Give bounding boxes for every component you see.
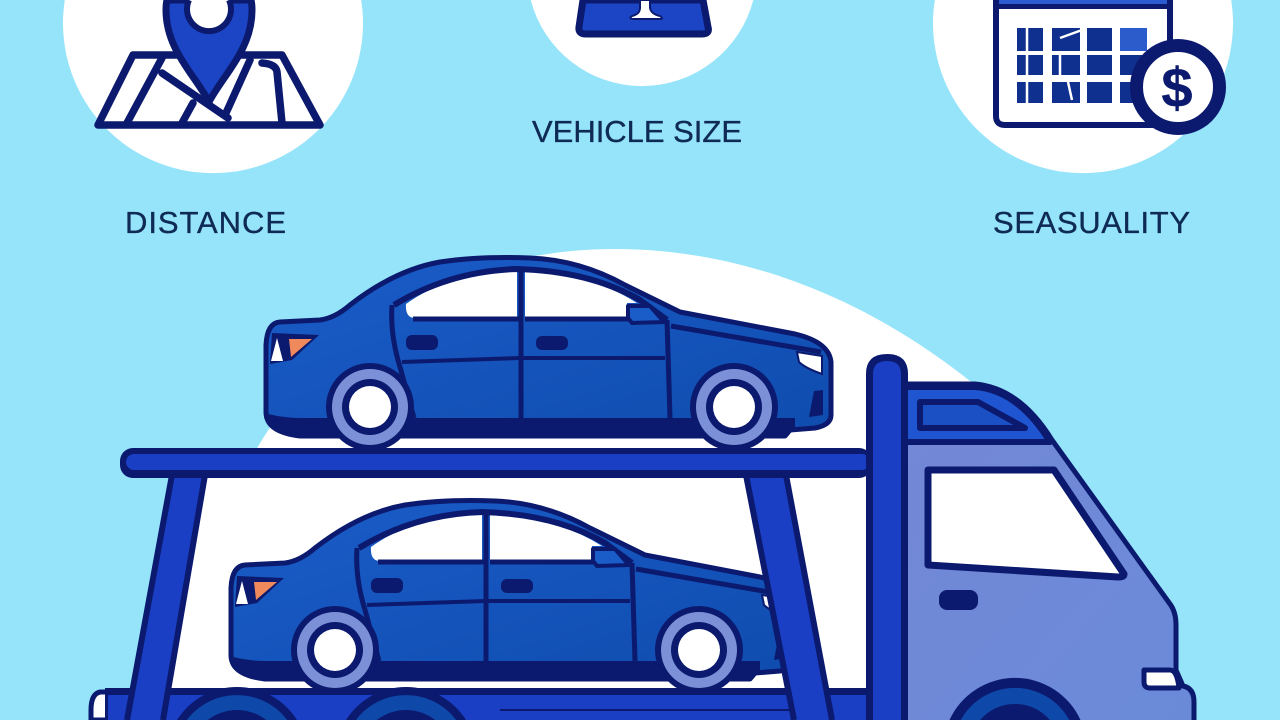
cab mast (866, 354, 908, 720)
door handle (939, 590, 978, 610)
icon: distance map and pin (63, 0, 363, 173)
top rail (120, 448, 872, 478)
truck deck (91, 688, 870, 720)
label: vehicle size: VEHICLE SIZE (532, 114, 742, 149)
truck frame rails and struts (120, 354, 908, 720)
cab window (928, 470, 1124, 577)
label: seasonality: SEASUALITY (993, 205, 1190, 240)
truck rear wheels (177, 687, 466, 720)
truck window background (168, 478, 866, 692)
icon: seasonality calendar and dollar (933, 0, 1233, 173)
car: lower sedan (231, 500, 796, 694)
truck cab (900, 384, 1194, 720)
icon: seasonality calendar and dollar: $ (1161, 56, 1193, 119)
car: top sedan (266, 258, 831, 451)
white area right of lower car (788, 478, 866, 692)
label: distance: DISTANCE (125, 205, 286, 240)
icon: vehicle size road (531, 0, 753, 86)
background blob behind truck (255, 249, 975, 480)
cab wheel (950, 678, 1080, 720)
headlight (1144, 670, 1179, 688)
